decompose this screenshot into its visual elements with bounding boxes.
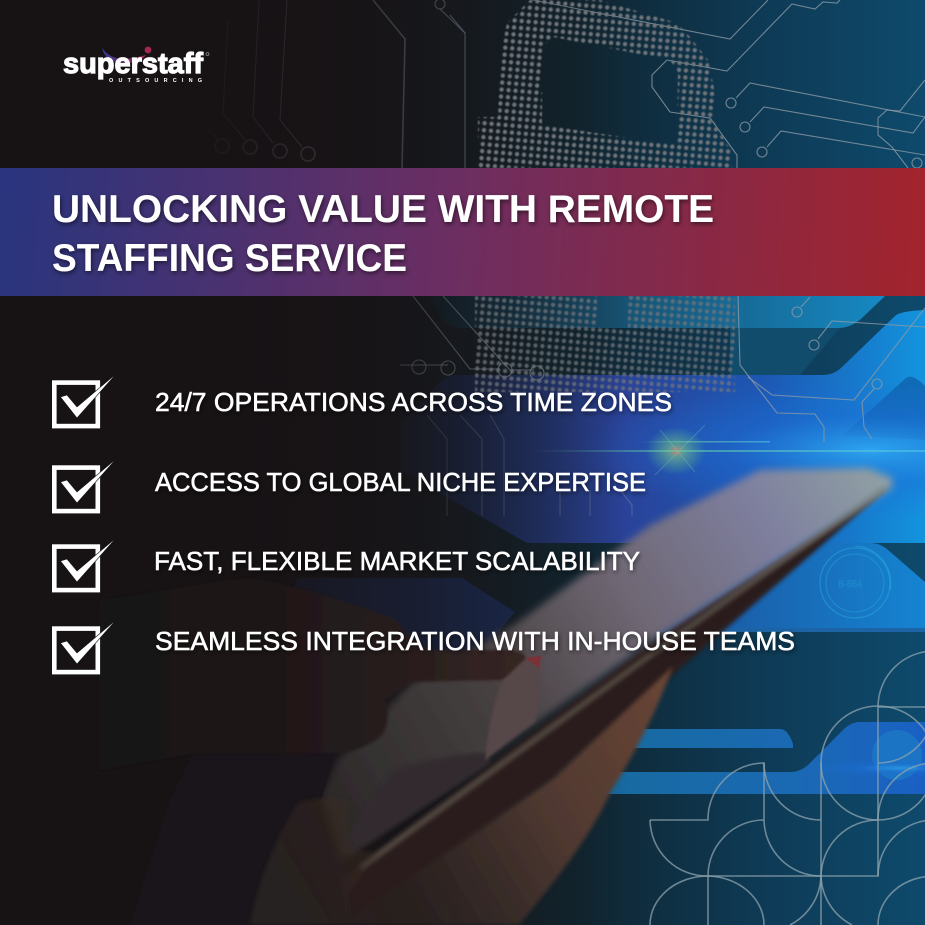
tablet body edge — [340, 484, 892, 922]
item 1 — [54, 373, 672, 426]
logo: Superstaff Outsourcing — [63, 47, 209, 84]
fingers — [100, 579, 527, 770]
item text: 24/7 OPERATIONS ACROSS TIME ZONES — [155, 389, 672, 417]
title heading: UNLOCKING VALUE WITH REMOTE — [52, 188, 714, 231]
photo: hand holding tablet — [100, 468, 892, 925]
palm and thumb — [250, 666, 673, 925]
logo wordmark: superstaff — [63, 48, 203, 80]
second fingertip — [485, 656, 541, 760]
reflection on tablet — [349, 760, 483, 847]
title banner — [0, 168, 925, 296]
item text: SEAMLESS INTEGRATION WITH IN-HOUSE TEAMS — [155, 628, 795, 656]
logo dot — [145, 47, 151, 53]
tablet edge highlight — [360, 488, 885, 868]
nail — [525, 656, 541, 668]
item 4 — [54, 619, 795, 672]
HUD circle — [820, 546, 891, 618]
lens flare — [530, 425, 925, 475]
title heading: STAFFING SERVICE — [52, 237, 407, 280]
item text: ACCESS TO GLOBAL NICHE EXPERTISE — [155, 469, 646, 497]
background: glowing blue technology bands — [250, 296, 925, 794]
geometric line art — [650, 651, 925, 925]
item text: FAST, FLEXIBLE MARKET SCALABILITY — [154, 548, 640, 576]
icon: dotted padlock — [475, 0, 735, 392]
item 2 — [54, 458, 646, 511]
HUD circle: B-554 — [838, 579, 862, 589]
sleeve shadow — [130, 750, 337, 925]
tablet screen — [321, 468, 892, 862]
checklist — [54, 373, 795, 672]
logo registered mark — [206, 52, 209, 56]
circuit lines — [205, 0, 925, 516]
icon: checkbox — [54, 537, 117, 590]
icon: checkbox — [54, 458, 117, 511]
icon: checkbox — [54, 373, 117, 426]
item 3 — [54, 537, 640, 590]
title heading — [52, 188, 714, 280]
icon: checkbox — [54, 619, 117, 672]
logo tagline: OUTSOURCING — [109, 78, 202, 84]
logo swoosh — [102, 48, 146, 63]
